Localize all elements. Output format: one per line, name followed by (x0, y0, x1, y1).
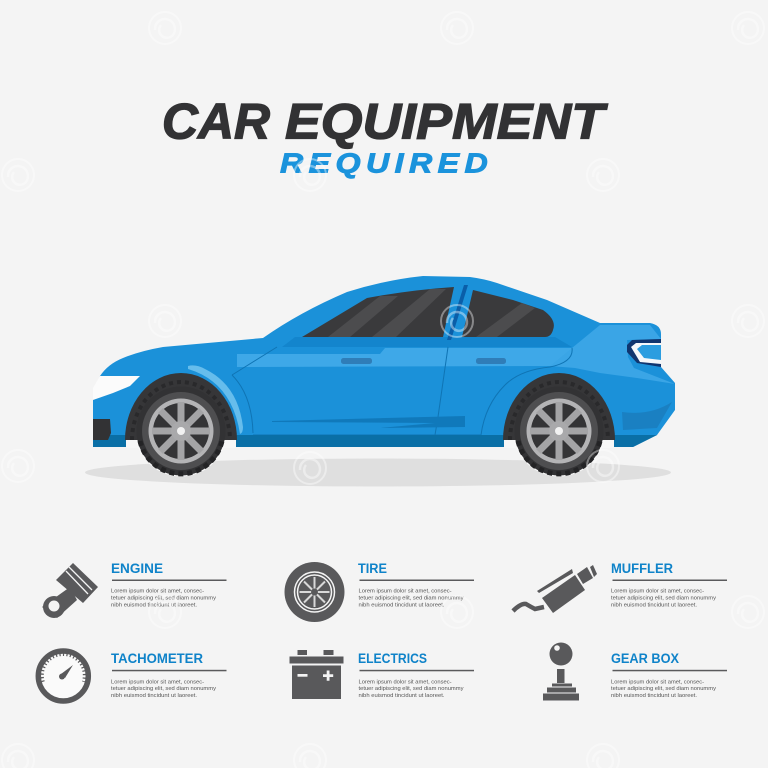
item: tire: TIRE (358, 561, 387, 576)
item: tire: nibh euismod tincidunt ut laoreet. (358, 603, 445, 609)
door lines (232, 347, 572, 435)
front arch cutout (126, 440, 236, 448)
item: gear box: GEAR BOX (611, 651, 679, 666)
door handle front (341, 358, 372, 364)
headlight (93, 376, 140, 400)
rear lower panel (622, 402, 672, 430)
rear arch cutout (504, 440, 614, 448)
door handle rear (476, 358, 506, 364)
icon: gear stick (543, 642, 579, 700)
fender highlight (188, 365, 243, 434)
title (162, 94, 609, 150)
item: engine (111, 561, 226, 609)
front wheel arch (125, 373, 237, 440)
item: muffler: nibh euismod tincidunt ut laoreet. (611, 603, 697, 609)
front window glare (328, 289, 446, 337)
lower door crease (272, 416, 465, 428)
item: tachometer: TACHOMETER (111, 651, 203, 666)
item: gear box: nibh euismod tincidunt ut laoreet. (611, 693, 697, 699)
item: tachometer: nibh euismod tincidunt ut laoreet. (111, 693, 197, 699)
item: muffler: Lorem ipsum dolor sit amet, consec- (611, 588, 704, 594)
icon: battery (290, 650, 344, 699)
icon: tire (284, 562, 344, 622)
window sill band (282, 337, 572, 347)
item: muffler: tetuer adipiscing elit, sed diam nonummy (611, 596, 716, 602)
item: gear box (611, 651, 727, 699)
title: CAR (162, 94, 270, 150)
item: muffler (611, 561, 727, 609)
front wheel (136, 386, 226, 476)
item: electrics: Lorem ipsum dolor sit amet, consec- (358, 680, 452, 686)
car body (93, 276, 675, 447)
rear window glare (476, 303, 535, 337)
car ground shadow (85, 458, 671, 486)
rear wheel (514, 386, 604, 476)
subtitle: REQUIRED (280, 148, 493, 179)
item: engine: Lorem ipsum dolor sit amet, consec- (111, 588, 204, 594)
item: tire: tetuer adipiscing elit, sed diam nonummy (358, 596, 464, 602)
car illustration (93, 276, 675, 476)
rear wheel arch (503, 373, 615, 440)
item: tire (358, 561, 474, 609)
rear window (462, 290, 554, 337)
item: tachometer: tetuer adipiscing elit, sed diam nonummy (111, 686, 216, 692)
sill (93, 435, 657, 447)
rear quarter highlight (550, 325, 675, 384)
light side panel (237, 348, 572, 367)
tail light (627, 339, 661, 367)
icon: tachometer (38, 651, 88, 701)
icon: muffler (513, 565, 597, 613)
door pillar (447, 285, 468, 340)
item: engine: ENGINE (111, 561, 163, 576)
front bumper intake (93, 419, 111, 440)
item: electrics: tetuer adipiscing elit, sed diam nonummy (358, 686, 464, 692)
item: tachometer (111, 651, 226, 699)
title: EQUIPMENT (285, 94, 609, 150)
item: engine: tetuer adipiscing elit, sed diam nonummy (111, 596, 216, 602)
item: gear box: Lorem ipsum dolor sit amet, consec- (611, 680, 704, 686)
item: gear box: tetuer adipiscing elit, sed diam nonummy (611, 686, 716, 692)
item: electrics (358, 651, 474, 699)
item: electrics: nibh euismod tincidunt ut laoreet. (358, 693, 445, 699)
icon: piston (42, 563, 98, 618)
item: engine: nibh euismod tincidunt ut laoreet. (111, 603, 197, 609)
item: tachometer: Lorem ipsum dolor sit amet, consec- (111, 680, 204, 686)
item: muffler: MUFFLER (611, 561, 673, 576)
item: tire: Lorem ipsum dolor sit amet, consec- (358, 588, 452, 594)
front window (302, 287, 454, 337)
item: electrics: ELECTRICS (358, 651, 427, 666)
